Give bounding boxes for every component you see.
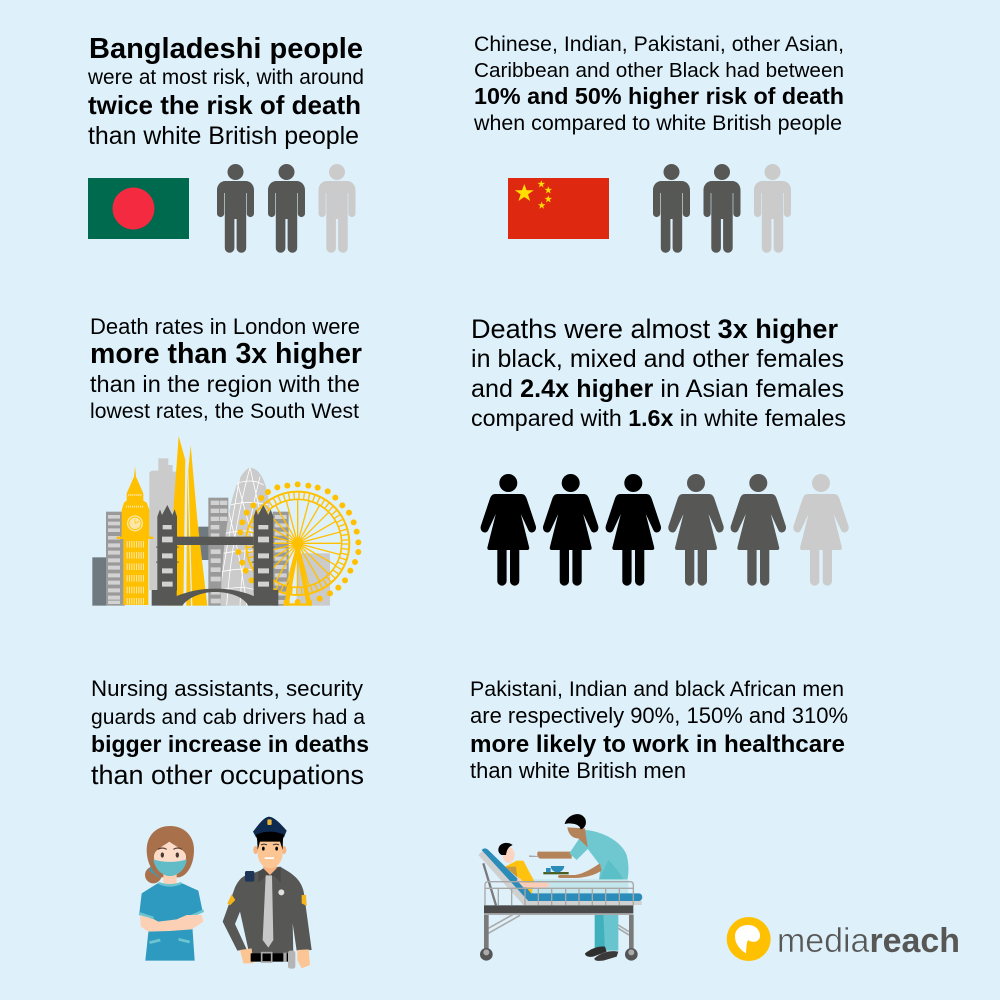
text: occupations: [91, 676, 369, 790]
text: healthcare: [470, 677, 848, 783]
heading: Bangladeshi text: were at most risk, with around: [87, 66, 364, 89]
security guard: [223, 817, 312, 969]
text: occupations: Nursing assistants, security: [91, 676, 364, 701]
text: ethnic groups: when compared to white British people: [473, 111, 842, 135]
text: healthcare: are respectively 90%, 150% and 310%: [470, 703, 848, 728]
text: females: compared with 1.6x in white females: [471, 405, 846, 431]
heading: Bangladeshi text: than white British people: [88, 122, 359, 150]
logo: mediareach: [727, 917, 960, 961]
Tower Bridge: [152, 505, 278, 606]
text: females: Deaths were almost 3x higher: [471, 313, 838, 344]
panel: healthcare work: [470, 677, 848, 961]
icon: three men, two of three dark: [653, 164, 791, 253]
panel: London death rates: [90, 314, 362, 606]
nurse: [139, 826, 204, 961]
text: females: and 2.4x higher in Asian females: [471, 375, 844, 403]
text: females: in black, mixed and other females: [471, 345, 844, 373]
icon: six women: [481, 474, 849, 586]
text: occupations: than other occupations: [91, 760, 364, 790]
heading: Bangladeshi text: twice the risk of death: [88, 90, 361, 120]
text: London: Death rates in London were: [90, 314, 360, 339]
text: females: [471, 313, 846, 431]
icon: three men, two of three dark: [217, 164, 356, 253]
healthcare worker: [529, 814, 602, 878]
London Eye: [235, 481, 361, 606]
heading: Bangladeshi text: Bangladeshi people: [89, 33, 363, 65]
text: London: than in the region with the: [90, 371, 360, 397]
text: healthcare: than white British men: [470, 758, 686, 783]
illustration: healthcare worker feeding patient in bed: [478, 814, 642, 961]
bed rail: [485, 882, 633, 905]
panel: occupations: [91, 676, 369, 969]
text: occupations: guards and cab drivers had a: [91, 706, 365, 729]
text: ethnic groups: [473, 33, 844, 135]
text: ethnic groups: 10% and 50% higher risk of death: [474, 83, 844, 109]
text: London: lowest rates, the South West: [90, 400, 359, 423]
text: ethnic groups: Caribbean and other Black had between: [474, 59, 844, 82]
Big Ben: [117, 466, 153, 605]
icon: logo mark: [727, 917, 771, 961]
wordmark: mediareach: [777, 922, 960, 960]
text: healthcare: Pakistani, Indian and black African men: [470, 677, 844, 701]
patient: [498, 843, 549, 894]
illustration: nurse and security guard: [139, 817, 312, 969]
text: London: [90, 314, 362, 423]
panel: Bangladeshi risk: [87, 33, 364, 253]
text: healthcare: more likely to work in healthcare: [470, 731, 845, 758]
icon: China flag: [508, 178, 609, 239]
text: London: more than 3x higher: [90, 338, 362, 370]
panel: female death rates: [471, 313, 849, 586]
heading: Bangladeshi text: [87, 33, 364, 150]
illustration: London skyline: [92, 436, 361, 606]
text: ethnic groups: Chinese, Indian, Pakistani, other Asian,: [474, 33, 844, 56]
icon: Bangladesh flag: [88, 178, 189, 239]
panel: other ethnic groups risk: [473, 33, 844, 253]
text: occupations: bigger increase in deaths: [91, 731, 369, 757]
